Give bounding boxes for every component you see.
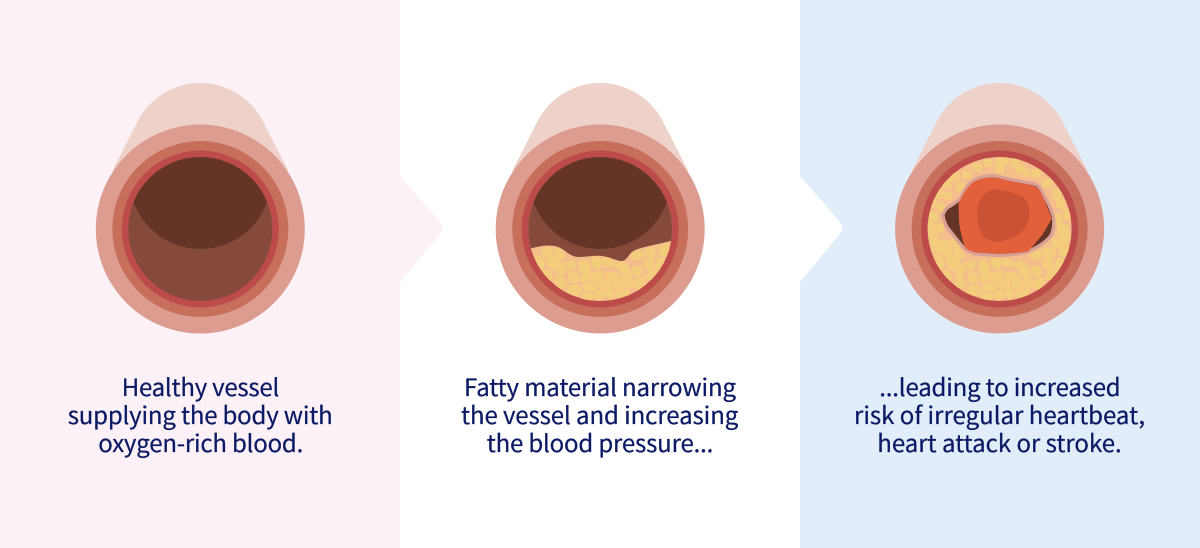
- caption: fatty material: [461, 368, 739, 459]
- caption: fatty material: the vessel and increasing: [461, 396, 739, 431]
- caption: increased risk: [854, 368, 1145, 459]
- caption: healthy vessel: [68, 368, 333, 459]
- icon: narrowed vessel cross-section: [496, 83, 705, 334]
- panel: fatty material: [461, 83, 739, 459]
- plaque rupture and clot: [943, 176, 1054, 255]
- caption: fatty material: the blood pressure...: [487, 424, 713, 459]
- caption: healthy vessel: Healthy vessel: [122, 368, 279, 403]
- panel: healthy vessel: [0, 0, 400, 548]
- icon: healthy vessel cross-section: [96, 83, 305, 334]
- caption: increased risk: heart attack or stroke.: [877, 424, 1122, 459]
- panel: increased risk: [800, 0, 1200, 548]
- arrow: first to second panel: [400, 176, 442, 282]
- caption: healthy vessel: oxygen-rich blood.: [98, 424, 303, 459]
- caption: healthy vessel: supplying the body with: [68, 396, 333, 431]
- icon: blocked vessel cross-section: [895, 83, 1104, 334]
- arrow: second to third panel: [800, 176, 842, 282]
- caption: increased risk: ...leading to increased: [879, 368, 1121, 403]
- caption: increased risk: risk of irregular heartbeat,: [854, 396, 1145, 431]
- caption: fatty material: Fatty material narrowing: [464, 368, 736, 403]
